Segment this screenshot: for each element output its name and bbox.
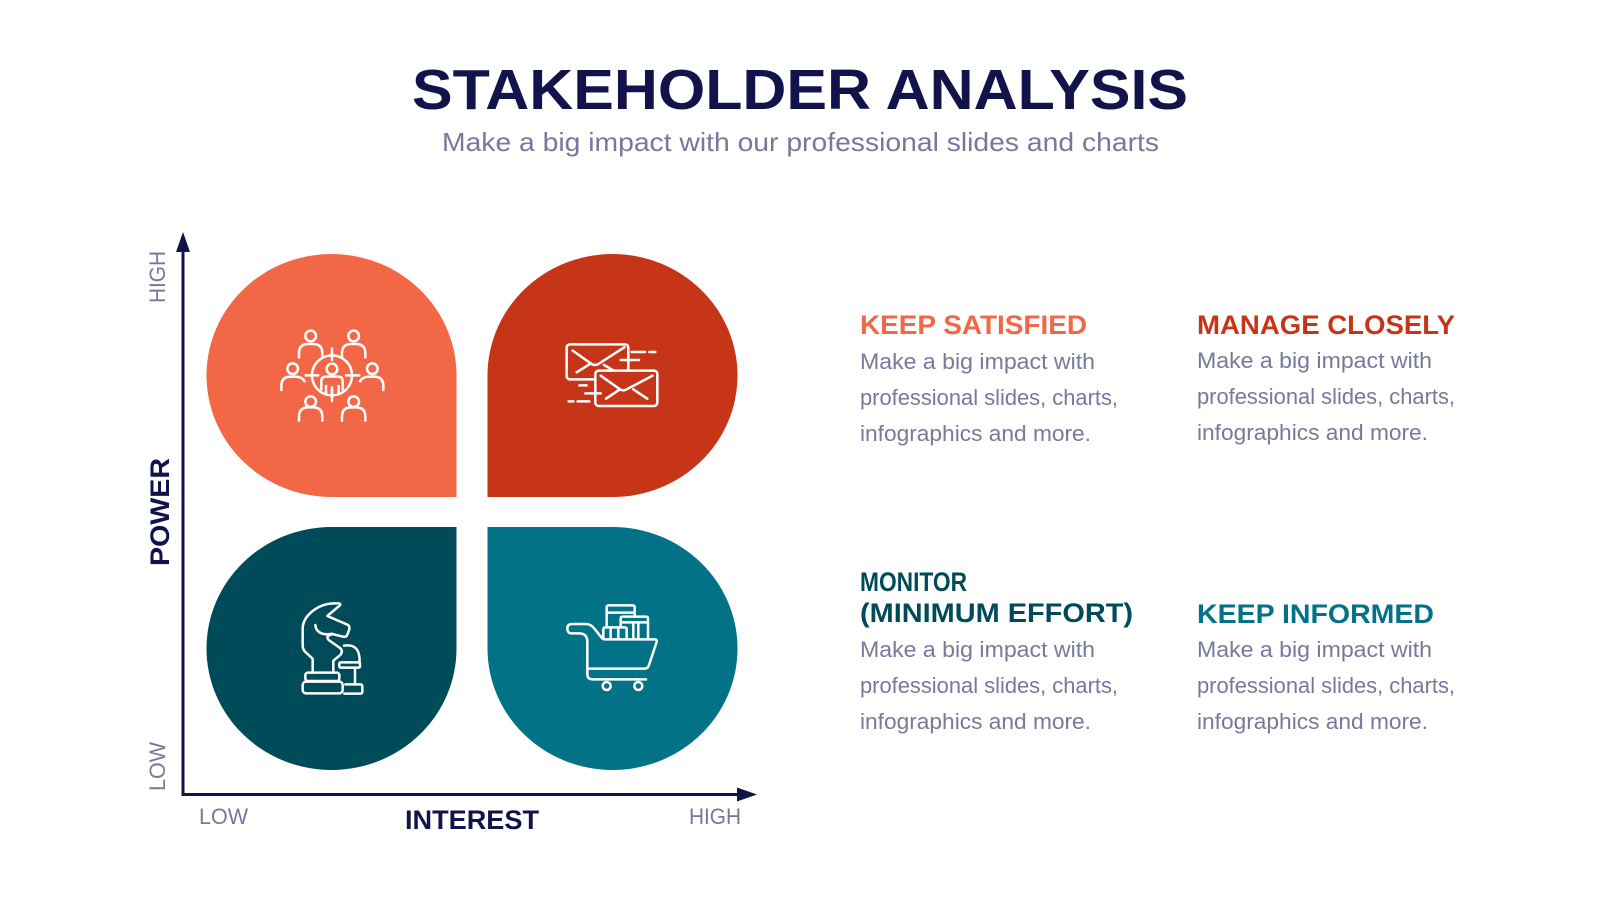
y axis label: power: POWER xyxy=(145,458,175,566)
title: STAKEHOLDER ANALYSIS xyxy=(412,58,1188,122)
text block: professional slides, charts, xyxy=(1197,384,1455,409)
text block: Make a big impact with xyxy=(860,637,1095,662)
icon: target audience xyxy=(281,331,383,421)
y axis label: low: LOW xyxy=(145,742,170,791)
heading: manage closely: MANAGE CLOSELY xyxy=(1197,310,1455,340)
text block: Make a big impact with xyxy=(1197,348,1432,373)
heading: keep informed: KEEP INFORMED xyxy=(1197,599,1434,629)
text block xyxy=(1197,348,1455,445)
text block: Make a big impact with xyxy=(860,349,1095,374)
text block xyxy=(860,349,1118,446)
x axis label: high: HIGH xyxy=(689,804,741,829)
y axis with arrow xyxy=(176,232,190,794)
quadrant: keep satisfied xyxy=(207,254,456,497)
text block xyxy=(1197,637,1455,734)
text block: infographics and more. xyxy=(860,709,1091,734)
text block: professional slides, charts, xyxy=(860,673,1118,698)
panel: keep satisfied xyxy=(860,310,1118,446)
x axis with arrow xyxy=(182,788,757,802)
y axis label: high: HIGH xyxy=(145,251,170,303)
text block: professional slides, charts, xyxy=(1197,673,1455,698)
text block: Make a big impact with xyxy=(1197,637,1432,662)
icon: shopping cart xyxy=(567,605,657,690)
text block: infographics and more. xyxy=(1197,709,1428,734)
heading: keep satisfied: KEEP SATISFIED xyxy=(860,310,1087,340)
heading: monitor (minimum effort): (MINIMUM EFFORT) xyxy=(860,598,1133,628)
panel: manage closely xyxy=(1197,310,1455,445)
x axis label: interest: INTEREST xyxy=(405,805,540,835)
text block: professional slides, charts, xyxy=(860,385,1118,410)
quadrant: manage closely xyxy=(488,254,738,497)
icon: envelopes xyxy=(567,344,657,406)
heading: monitor (minimum effort) xyxy=(860,567,1133,628)
text block: infographics and more. xyxy=(1197,420,1428,445)
text block xyxy=(860,637,1118,734)
panel: monitor xyxy=(860,567,1133,734)
x axis label: low: LOW xyxy=(199,804,248,829)
quadrant: monitor xyxy=(207,527,456,770)
icon: chess pieces xyxy=(303,603,362,694)
heading: monitor (minimum effort): MONITOR xyxy=(860,567,967,597)
subtitle: Make a big impact with our professional slides and charts xyxy=(442,127,1159,157)
text block: infographics and more. xyxy=(860,421,1091,446)
quadrant: keep informed xyxy=(488,527,738,770)
panel: keep informed xyxy=(1197,599,1455,734)
matrix chart xyxy=(145,232,757,835)
